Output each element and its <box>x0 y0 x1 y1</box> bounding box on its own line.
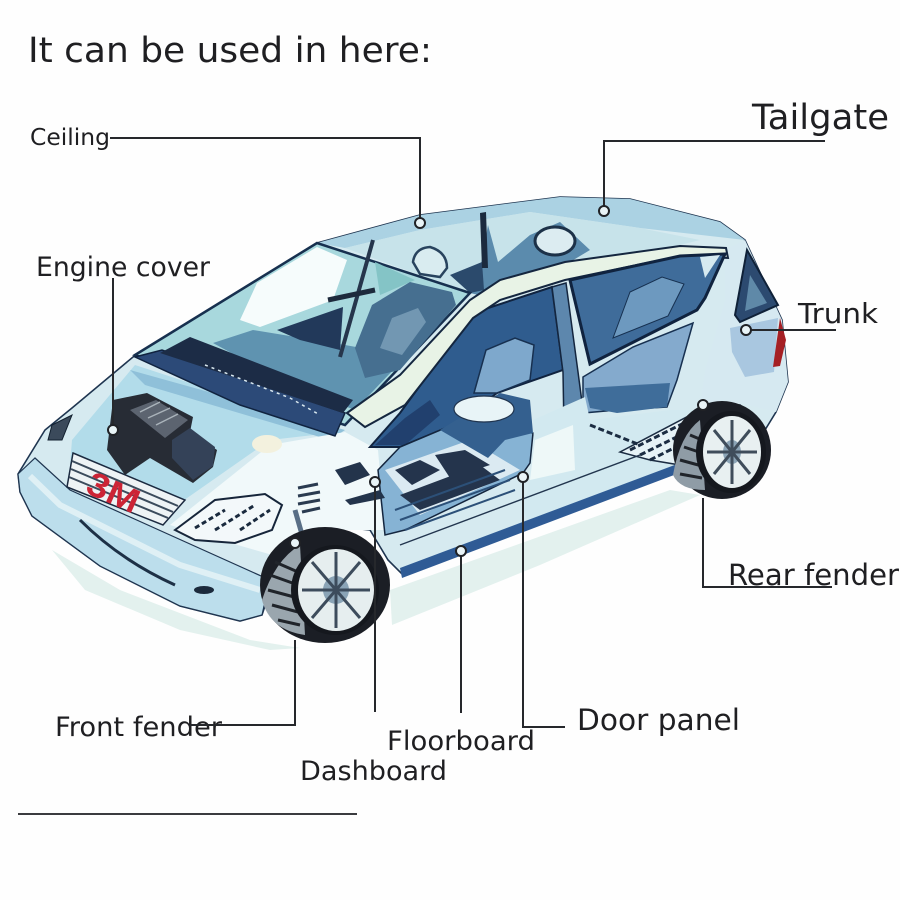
label: Door panel <box>518 472 740 737</box>
label: Trunk <box>741 297 879 335</box>
windshield glare <box>240 247 347 327</box>
washer cap <box>252 435 282 453</box>
label: Floorboard <box>387 546 535 757</box>
label: Tailgate <box>599 98 889 216</box>
label: Engine cover <box>36 252 211 435</box>
car ground shadow <box>52 490 700 650</box>
label: Rear fender <box>698 400 899 592</box>
label: Ceiling: Ceiling <box>30 125 110 151</box>
front bay parts <box>335 462 385 505</box>
label: Floorboard: Floorboard <box>387 726 535 757</box>
label: Trunk: Trunk <box>797 297 879 330</box>
label: Front fender <box>55 538 300 743</box>
bottom rule <box>18 813 357 815</box>
title: It can be used in here: <box>28 31 432 71</box>
windshield <box>135 243 470 425</box>
headlight <box>175 494 282 543</box>
engine bay <box>70 365 340 510</box>
front fender white area <box>170 432 385 560</box>
bumper and front corner <box>18 458 270 621</box>
radiator grille <box>67 453 185 525</box>
far front seat headrest <box>413 247 447 277</box>
door opening: front interior <box>370 287 563 447</box>
label: Rear fender: Rear fender <box>728 558 899 592</box>
label: Tailgate: Tailgate <box>751 98 889 138</box>
far side interior behind roof <box>345 212 700 300</box>
front side seat <box>474 338 534 393</box>
front seat through windshield <box>355 282 456 378</box>
engine <box>107 393 217 483</box>
label: Engine cover: Engine cover <box>36 252 211 283</box>
sill <box>400 463 682 578</box>
rear quarter panel <box>700 240 788 412</box>
label: Dashboard <box>300 477 447 787</box>
suspension spring <box>298 484 320 512</box>
floor pan <box>378 423 533 535</box>
B-pillar <box>552 283 585 430</box>
roof band <box>317 197 745 248</box>
rear window <box>735 250 778 322</box>
dashboard through windshield <box>213 305 455 410</box>
front wheel <box>260 527 390 643</box>
far rear seat headrest <box>535 227 575 255</box>
rear wheel <box>673 401 771 499</box>
door lower panel <box>523 397 710 525</box>
steering column <box>340 240 373 357</box>
label: Front fender: Front fender <box>55 712 223 743</box>
label: Ceiling <box>30 125 425 228</box>
label: Dashboard: Dashboard <box>300 756 447 787</box>
illustration: car cutaway <box>18 197 788 650</box>
door mirror <box>454 396 514 422</box>
rear floor machinery <box>620 410 705 465</box>
A-pillar and roof rail <box>347 246 728 427</box>
3M logo: 3M <box>81 465 146 521</box>
rear seat base <box>583 323 693 413</box>
door opening: rear interior <box>570 254 725 364</box>
car body shell <box>18 197 788 621</box>
left indicator <box>48 415 72 440</box>
cowl and wipers <box>135 350 345 436</box>
tail light <box>773 318 786 367</box>
label: Door panel: Door panel <box>577 703 740 737</box>
